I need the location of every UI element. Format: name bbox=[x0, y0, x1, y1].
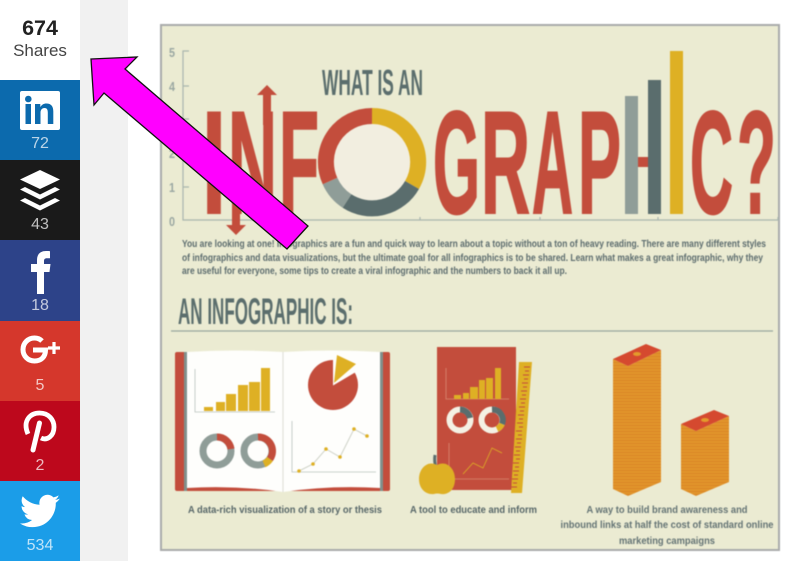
illustration: tall stack of money bbox=[613, 344, 661, 496]
caption: data-rich: A data-rich visualization of a story or thesis bbox=[188, 504, 382, 516]
google plus button bbox=[0, 321, 80, 401]
title: infographic: R bbox=[481, 81, 530, 244]
caption: brand awareness: marketing campaigns bbox=[619, 535, 715, 547]
buffer button bbox=[0, 160, 80, 240]
chart axis: 4 bbox=[169, 79, 176, 94]
letter I bar bbox=[670, 51, 683, 214]
panel: infographic card: WHAT IS AN bbox=[322, 62, 423, 103]
arrow down on N bbox=[226, 200, 246, 235]
chart axis: 5 bbox=[169, 45, 175, 60]
caption: brand awareness: A way to build brand awareness and bbox=[586, 504, 748, 516]
buffer button: 43 bbox=[31, 216, 49, 233]
illustration: open book bbox=[175, 350, 390, 492]
share total: Shares bbox=[13, 41, 67, 60]
title: infographic: P bbox=[578, 81, 621, 244]
twitter button: 534 bbox=[27, 537, 53, 554]
ruler bbox=[511, 362, 532, 493]
notebook line chart bbox=[449, 443, 509, 479]
title: infographic: F bbox=[279, 81, 319, 244]
chart axis bbox=[169, 45, 779, 229]
arrow: magenta pointer to share count bbox=[91, 57, 308, 249]
chart axis: 0 bbox=[169, 214, 175, 229]
title: infographic bbox=[202, 51, 776, 244]
book donut charts bbox=[203, 437, 273, 465]
twitter button bbox=[0, 481, 80, 561]
title: infographic: C bbox=[690, 81, 733, 244]
book pie chart bbox=[308, 355, 366, 410]
panel: infographic card: AN INFOGRAPHIC IS: bbox=[178, 291, 353, 332]
share total: 674 bbox=[22, 16, 58, 40]
title: infographic: I bbox=[202, 81, 226, 244]
apple bbox=[419, 455, 455, 494]
facebook button bbox=[0, 240, 80, 321]
linkedin button: 72 bbox=[31, 135, 49, 152]
letter H bars bbox=[625, 80, 661, 214]
pinterest button: 2 bbox=[36, 457, 45, 474]
arrow up on N bbox=[257, 85, 277, 125]
pinterest button bbox=[0, 401, 80, 481]
caption: tool: A tool to educate and inform bbox=[410, 504, 537, 516]
share total bbox=[0, 0, 80, 80]
chart axis: 1 bbox=[169, 180, 175, 195]
book bar chart bbox=[195, 368, 275, 412]
illustration: tool, notebook, ruler and apple bbox=[419, 347, 532, 494]
intro text: are useful for everyone, some tips to create a viral infographic and the numbers to back it all up. bbox=[182, 266, 567, 277]
linkedin button bbox=[0, 80, 80, 160]
illustration: short stack of money bbox=[681, 410, 729, 496]
facebook button: 18 bbox=[31, 297, 49, 314]
notebook bar chart bbox=[446, 368, 509, 399]
notebook donut charts bbox=[450, 409, 503, 430]
title: infographic: G bbox=[433, 81, 480, 244]
title: infographic: A bbox=[532, 81, 573, 244]
chart axis: 3 bbox=[169, 112, 175, 127]
donut letter O bbox=[326, 116, 418, 208]
google plus button: 5 bbox=[36, 377, 45, 394]
page gutter strip bbox=[80, 0, 128, 561]
caption: brand awareness: inbound links at half the cost of standard online bbox=[560, 519, 774, 531]
panel: share sidebar bbox=[0, 0, 80, 561]
intro text bbox=[182, 239, 766, 277]
book line chart bbox=[292, 421, 376, 473]
title: infographic: N bbox=[228, 81, 277, 244]
caption: brand awareness bbox=[560, 504, 774, 547]
panel: infographic card bbox=[161, 25, 779, 550]
chart axis: 2 bbox=[169, 146, 175, 161]
